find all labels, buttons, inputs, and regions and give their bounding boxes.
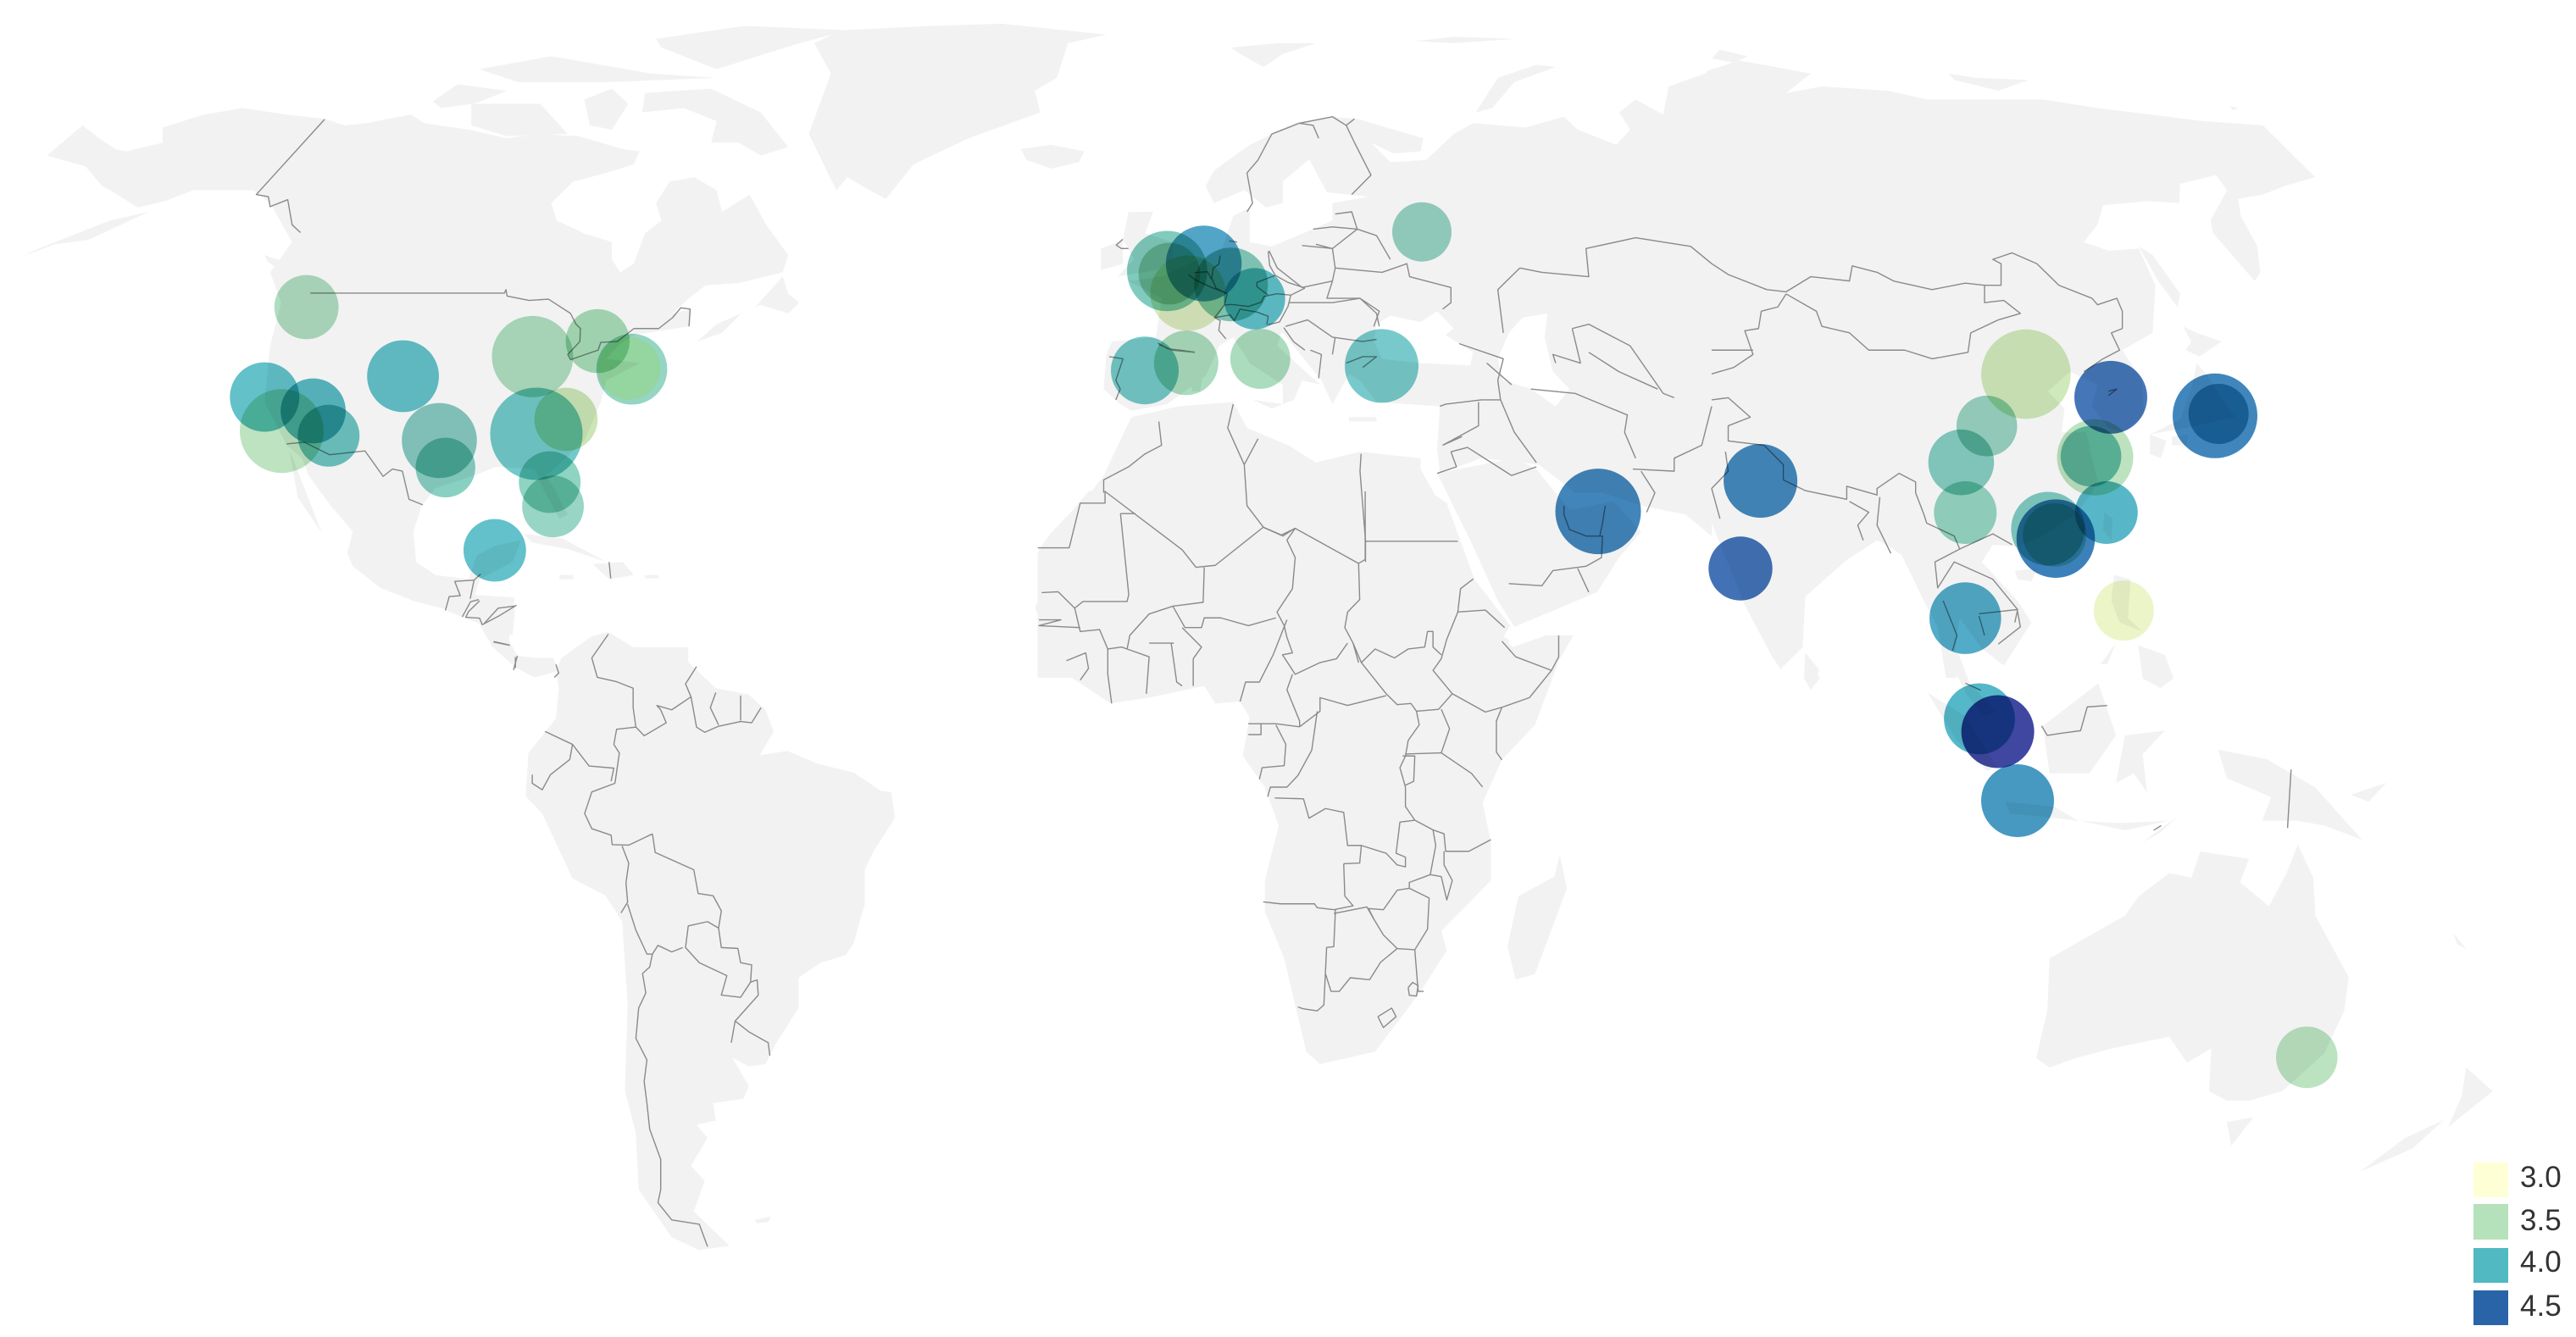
legend item 3.5: 3.5 xyxy=(2520,1204,2562,1237)
country borders xyxy=(256,117,2291,1246)
bubble: Arizona xyxy=(297,405,359,467)
bubble: Virginia xyxy=(535,388,597,451)
bubble: Shanghai inner xyxy=(2061,426,2121,486)
legend item 4.5 xyxy=(2473,1290,2562,1325)
bubble: Sichuan xyxy=(1929,430,1994,495)
bubble: Tokyo inner xyxy=(2189,384,2249,444)
bubble: Shanghai outer xyxy=(2057,419,2134,496)
Asia borders xyxy=(1712,252,2123,651)
bubble: Georgia xyxy=(519,452,580,513)
bubbles xyxy=(230,202,2338,1088)
legend item 3.0 xyxy=(2473,1161,2562,1197)
bubble: Moscow xyxy=(1392,202,1452,262)
bubble: Mumbai xyxy=(1708,536,1773,601)
Africa borders xyxy=(1038,491,1558,1028)
bubble: Shenzhen xyxy=(2023,503,2086,567)
legend item 4.5: 4.5 xyxy=(2520,1290,2562,1323)
bubble: Tokyo outer xyxy=(2173,374,2257,458)
South America borders xyxy=(463,600,770,1246)
bubble: UK outer xyxy=(1127,230,1208,311)
bubble: Vancouver xyxy=(275,275,339,339)
bubble: Taiwan xyxy=(2075,481,2138,544)
bubble: Malaysia xyxy=(1944,683,2015,754)
bubble: New York outer xyxy=(597,334,667,405)
bubble: California north xyxy=(230,363,299,432)
bubble: Central China xyxy=(1957,396,2017,457)
bubble: Seoul xyxy=(2074,361,2147,434)
Southeast Asia and Oceania xyxy=(1928,643,2493,1172)
bubble: Nevada xyxy=(280,379,346,443)
bubble: Florida xyxy=(522,475,584,537)
bubble: Turkey xyxy=(1345,329,1418,402)
East Asia xyxy=(1706,50,2315,678)
bubble: Switzerland xyxy=(1224,268,1285,330)
bubble: Atlanta region xyxy=(490,388,583,480)
bubble: Yunnan xyxy=(1934,481,1996,544)
bubble: Gulf xyxy=(1556,469,1641,554)
North America xyxy=(19,26,849,635)
bubble: Italy xyxy=(1230,329,1291,389)
legend xyxy=(2473,1161,2562,1325)
Southeast Asia and Oceania borders xyxy=(1965,683,2291,830)
legend item 4.0 xyxy=(2473,1245,2562,1283)
bubble: Hong Kong xyxy=(2017,499,2095,578)
bubble: Philippines xyxy=(2094,580,2154,641)
Africa, Madagascar and Sri Lanka xyxy=(1035,491,1820,1064)
bubble: Thailand xyxy=(1929,582,2001,654)
bubble: Singapore xyxy=(1962,695,2035,768)
bubble: New York inner xyxy=(597,337,660,400)
legend item 3.0: 3.0 xyxy=(2520,1161,2562,1194)
bubble: Delhi xyxy=(1724,444,1797,518)
bubble: UK inner xyxy=(1139,243,1200,304)
legend item 4.0: 4.0 xyxy=(2520,1245,2562,1279)
bubble: Dallas xyxy=(402,403,477,478)
bubble: Sydney xyxy=(2276,1027,2338,1088)
bubble: California south xyxy=(240,389,324,473)
bubble: France xyxy=(1151,256,1225,330)
Eurasia and North Africa borders xyxy=(1103,117,1712,592)
bubble: Houston xyxy=(415,438,475,497)
legend item 3.5 xyxy=(2473,1204,2562,1240)
North America borders xyxy=(256,119,690,668)
bubble: Denver xyxy=(367,341,439,412)
Europe, Greenland and West Asia xyxy=(808,24,1712,678)
bubble: Midwest xyxy=(491,316,573,397)
Western Europe borders xyxy=(1116,239,1305,352)
bubble: Yucatan xyxy=(464,519,526,581)
bubble: Germany xyxy=(1194,247,1268,321)
white inland seas xyxy=(1374,311,1569,407)
bubble: Guangdong xyxy=(2011,491,2085,566)
bubble: Portugal xyxy=(1111,336,1179,404)
bubble: Beijing region xyxy=(1981,330,2071,419)
bubble: Toronto xyxy=(566,309,630,373)
bubble: Netherlands xyxy=(1166,225,1241,302)
South America xyxy=(446,593,895,1251)
bubble: Spain xyxy=(1154,330,1219,395)
bubble: Jakarta xyxy=(1981,764,2054,837)
